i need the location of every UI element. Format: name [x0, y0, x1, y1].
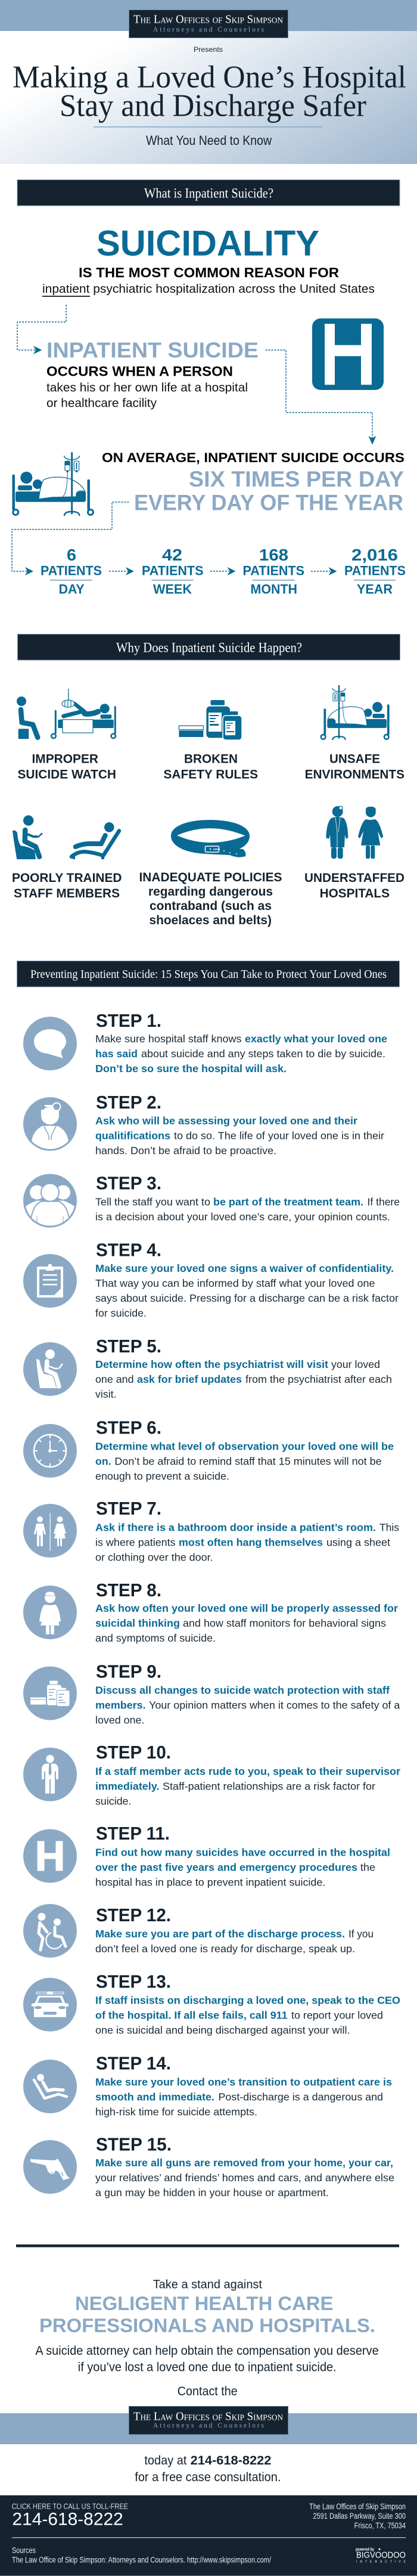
definition text block: INPATIENT SUICIDE — [46, 338, 259, 362]
text: Post-discharge is a dangerous and — [218, 2091, 383, 2103]
call to action text: Contact the — [178, 2385, 238, 2398]
stat: 2,016 patients per year: 2,016 — [351, 546, 398, 564]
icon: staff man — [23, 1748, 77, 1801]
text — [95, 1262, 399, 1319]
title: Stay and Discharge Safer — [60, 89, 366, 123]
arrow — [109, 567, 134, 575]
text: enough to prevent a suicide. — [95, 1470, 229, 1482]
text: Ask if there is a bathroom door inside a patient’s room. — [95, 1522, 376, 1534]
stat: 2,016 patients per year: PATIENTS — [344, 563, 406, 578]
sources — [12, 2546, 271, 2565]
text — [95, 1522, 399, 1563]
call to action text: A suicide attorney can help obtain the compensation you deserve — [35, 2344, 379, 2358]
most common reason text: inpatient psychiatric hospitalization across the United States — [42, 283, 375, 296]
icon: bathroom figures — [23, 1504, 77, 1558]
text — [95, 1765, 400, 1807]
heading: STEP 10. — [96, 1742, 171, 1763]
icon: understaffed hospitals — [326, 806, 383, 859]
stat: 168 patients per month: PATIENTS — [243, 563, 304, 578]
text: a gun may be hidden in your house or apartment. — [95, 2187, 329, 2199]
heading: STEP 2. — [96, 1092, 161, 1113]
label: poorly trained staff members — [12, 871, 122, 900]
step 14 — [23, 2053, 392, 2118]
footer panel — [0, 2495, 417, 2576]
most common reason text — [42, 265, 375, 297]
big voodoo logo: INTERACTIVE — [356, 2560, 406, 2564]
arrow: from inpatient to definition — [17, 305, 66, 354]
phone call to action: 214-618-8222 — [191, 2454, 271, 2467]
icon: unsafe environments — [321, 685, 390, 740]
phone number: 214-618-8222 — [12, 2509, 123, 2529]
text: Make sure all guns are removed from your home, your car, — [95, 2157, 393, 2169]
text: Determine how often the psychiatrist will visit — [95, 1358, 328, 1370]
step 8 — [23, 1580, 398, 1644]
stat: 168 patients per month — [243, 546, 304, 597]
sources: The Law Office of Skip Simpson: Attorneys and Counselors. http://www.skipsimpson.com/ — [12, 2556, 271, 2565]
definition text block: OCCURS WHEN A PERSON — [46, 364, 233, 379]
icon: clipboard — [23, 1254, 77, 1308]
title: Making a Loved One’s Hospital — [13, 60, 406, 94]
definition text block: or healthcare facility — [46, 397, 157, 410]
text: be part of the treatment team. — [213, 1196, 363, 1208]
text: Make sure hospital staff knows — [95, 1033, 242, 1045]
stat: 6 patients per day: PATIENTS — [41, 563, 102, 578]
text: and symptoms of suicide. — [95, 1632, 216, 1644]
most common reason text: IS THE MOST COMMON REASON FOR — [79, 265, 339, 280]
big voodoo logo — [356, 2547, 406, 2564]
text: If there — [367, 1196, 400, 1208]
heading: STEP 7. — [96, 1498, 161, 1519]
text: If a staff member acts rude to you, speak to their supervisor — [95, 1765, 400, 1777]
heading: STEP 4. — [96, 1239, 161, 1260]
text — [95, 1358, 392, 1400]
heading: STEP 15. — [96, 2134, 172, 2154]
text: says about suicide. Pressing for a discharge can be a risk factor — [95, 1292, 399, 1304]
text: one is suicidal and being discharged against your will. — [95, 2024, 350, 2036]
law firm logo — [129, 10, 288, 38]
icon: hospital H — [23, 1829, 77, 1883]
text: using a sheet — [326, 1536, 390, 1548]
icon: hospital bed with IV — [12, 452, 93, 516]
label: unsafe environments: UNSAFE — [329, 753, 380, 766]
text: about suicide and any steps taken to die by suicide. — [141, 1048, 385, 1060]
text: visit. — [95, 1388, 117, 1400]
icon: belt — [171, 820, 250, 857]
text: suicidal thinking — [95, 1617, 180, 1629]
icon: therapist — [23, 1342, 77, 1396]
icon: nurse — [23, 1586, 77, 1639]
label: inadequate policies: contraband (such as — [150, 899, 272, 913]
call us text: CLICK HERE TO CALL US TOLL-FREE — [12, 2502, 128, 2510]
icon: hospital H — [312, 318, 384, 390]
call to action text: PROFESSIONALS AND HOSPITALS. — [39, 2315, 375, 2336]
text — [95, 1994, 400, 2036]
text: your relatives’ and friends’ homes and cars, and anywhere else — [95, 2172, 394, 2184]
heading: STEP 1. — [96, 1010, 161, 1031]
step 2 — [23, 1092, 384, 1156]
text — [95, 1033, 387, 1075]
text: over the past five years and emergency procedures — [95, 1862, 357, 1874]
label: unsafe environments: ENVIRONMENTS — [305, 768, 404, 781]
text — [95, 2076, 392, 2118]
text: Tell the staff you want to — [95, 1196, 210, 1208]
icon: broken safety rules — [179, 700, 242, 740]
label: understaffed hospitals — [304, 871, 404, 900]
heading: STEP 12. — [96, 1905, 171, 1925]
label: inadequate policies — [139, 871, 282, 927]
step 5 — [23, 1336, 392, 1400]
text: smooth and immediate. — [95, 2091, 214, 2103]
law firm logo: Attorneys and Counselors — [153, 2422, 264, 2429]
step 11 — [23, 1823, 390, 1888]
heading: STEP 9. — [96, 1661, 161, 1682]
presents: Presents — [194, 45, 223, 54]
icon: speech bubble — [23, 1017, 77, 1070]
phone call to action — [135, 2454, 281, 2484]
stat: 168 patients per month: MONTH — [250, 582, 297, 597]
text: Make sure your loved one signs a waiver of confidentiality. — [95, 1262, 394, 1274]
text: is where patients — [95, 1536, 176, 1548]
step 12 — [23, 1904, 374, 1958]
icon: police car — [23, 1978, 77, 2032]
text: If staff insists on discharging a loved one, speak to the CEO — [95, 1994, 400, 2006]
call to action text — [35, 2278, 379, 2398]
suicidality heading: SUICIDALITY — [97, 224, 319, 264]
icon: reclining patient — [23, 2060, 77, 2113]
law firm logo: The Law Offices of Skip Simpson — [133, 2410, 283, 2423]
stat: 42 patients per week: 42 — [162, 546, 182, 564]
text: high-risk time for suicide attempts. — [95, 2106, 257, 2118]
text — [95, 1114, 384, 1156]
heading: STEP 11. — [96, 1823, 170, 1844]
text: to do so. The life of your loved one is in their — [174, 1129, 384, 1141]
text: Staff-patient relationships are a risk factor for — [163, 1780, 375, 1792]
law firm logo: Attorneys and Counselors — [153, 26, 264, 33]
step 10 — [23, 1742, 400, 1807]
text: or clothing over the door. — [95, 1552, 213, 1563]
icon: person pushing wheelchair — [23, 1904, 77, 1958]
step 13 — [23, 1971, 400, 2036]
top band — [0, 0, 417, 31]
label: inadequate policies: regarding dangerous — [148, 885, 273, 899]
text: from the psychiatrist after each — [245, 1373, 392, 1385]
definition text block — [46, 338, 259, 410]
icon: poorly trained staff members — [13, 815, 119, 859]
text: Ask who will be assessing your loved one and their — [95, 1114, 357, 1126]
label: understaffed hospitals: UNDERSTAFFED — [304, 871, 404, 885]
text: Find out how many suicides have occurred in the hospital — [95, 1846, 390, 1858]
section band: why does it happen — [18, 634, 400, 660]
stat: 42 patients per week — [142, 546, 204, 597]
text: on. — [95, 1455, 111, 1467]
step 3 — [23, 1173, 400, 1228]
text — [95, 1196, 400, 1222]
heading: STEP 14. — [96, 2053, 171, 2074]
header panel — [0, 0, 417, 164]
phone call to action: for a free case consultation. — [135, 2470, 281, 2484]
step 6 — [23, 1417, 394, 1482]
text: That way you can be informed by staff what your loved one — [95, 1277, 375, 1289]
section band: 15 steps: Preventing Inpatient Suicide: 15 Steps You Can Take to Protect Your Loved Ones — [30, 968, 387, 981]
text: Don’t be so sure the hospital will ask. — [95, 1063, 287, 1075]
stat: 6 patients per day: 6 — [67, 546, 76, 564]
frequency text: EVERY DAY OF THE YEAR — [134, 490, 403, 515]
text: Discuss all changes to suicide watch protection with staff — [95, 1684, 390, 1696]
label: inadequate policies: INADEQUATE POLICIES — [139, 871, 282, 884]
step 7 — [23, 1498, 399, 1563]
label: broken safety rules: BROKEN — [184, 753, 238, 766]
text — [95, 1928, 374, 1955]
text: Make sure your loved one’s transition to outpatient care is — [95, 2076, 392, 2088]
text — [95, 1846, 390, 1888]
text: Don’t be afraid to remind staff that 15 minutes will not be — [114, 1455, 382, 1467]
stat: 168 patients per month: 168 — [259, 546, 288, 564]
section band: why does it happen: Why Does Inpatient Suicide Happen? — [116, 640, 302, 655]
label: unsafe environments — [305, 753, 404, 781]
stat: 6 patients per day: DAY — [59, 582, 85, 597]
label: improper suicide watch: SUICIDE WATCH — [18, 768, 116, 781]
label: understaffed hospitals: HOSPITALS — [320, 887, 390, 900]
text: qualitifications — [95, 1129, 170, 1141]
section band: 15 steps — [17, 961, 399, 987]
icon: doctor — [23, 1097, 77, 1151]
stat: 42 patients per week: PATIENTS — [142, 563, 204, 578]
icon: improper suicide watch — [17, 689, 116, 739]
text — [95, 1684, 400, 1726]
address: Frisco, TX, 75034 — [354, 2521, 406, 2530]
section band: what is inpatient suicide — [17, 180, 400, 206]
heading: STEP 8. — [96, 1580, 161, 1600]
text: Determine what level of observation your loved one will be — [95, 1440, 394, 1452]
icon: group of people — [23, 1174, 77, 1228]
text: Make sure you are part of the discharge process. — [95, 1928, 345, 1940]
call to action text: NEGLIGENT HEALTH CARE — [75, 2293, 333, 2314]
text — [95, 1602, 398, 1644]
phone call to action: today at — [144, 2454, 187, 2467]
arrow — [210, 567, 236, 575]
arrow — [311, 567, 337, 575]
text: ask for brief updates — [137, 1373, 242, 1385]
step 4 — [23, 1239, 399, 1319]
call to action text: if you’ve lost a loved one due to inpatient suicide. — [78, 2361, 337, 2374]
text: is a decision about your loved one’s care, your opinion counts. — [95, 1210, 390, 1222]
text: Your opinion matters when it comes to the safety of a — [149, 1699, 400, 1711]
sources: Sources — [12, 2546, 36, 2555]
text: hospital has in place to prevent inpatient suicide. — [95, 1876, 325, 1888]
text: immediately. — [95, 1780, 159, 1792]
text: the — [360, 1862, 375, 1874]
law firm logo: The Law Offices of Skip Simpson — [133, 13, 283, 26]
label: improper suicide watch — [18, 753, 116, 781]
title — [13, 60, 406, 123]
label: poorly trained staff members: POORLY TRAINED — [12, 871, 122, 885]
text: loved one. — [95, 1714, 144, 1726]
icon: pill bottles and blade — [23, 1667, 77, 1720]
text: This — [379, 1522, 399, 1534]
call to action text: Take a stand against — [153, 2278, 262, 2292]
definition text block: takes his or her own life at a hospital — [46, 382, 248, 395]
header gradient background — [0, 31, 417, 164]
contact band — [0, 2413, 417, 2444]
text: to report your loved — [291, 2009, 383, 2021]
stat: 6 patients per day — [41, 546, 102, 597]
subtitle: What You Need to Know — [146, 133, 272, 148]
text: most often hang themselves — [179, 1536, 323, 1548]
section band: what is inpatient suicide: What is Inpatient Suicide? — [144, 186, 273, 200]
heading: STEP 13. — [96, 1971, 171, 1992]
text: hands. Don’t be afraid to be proactive. — [95, 1144, 276, 1156]
arrow: definition to frequency — [266, 350, 376, 445]
stat: 2,016 patients per year: YEAR — [357, 582, 393, 597]
text: Ask how often your loved one will be properly assessed for — [95, 1602, 398, 1614]
label: poorly trained staff members: STAFF MEMBERS — [14, 887, 120, 900]
text: and how staff monitors for behavioral signs — [183, 1617, 386, 1629]
text: of the hospital. If all else fails, call 911 — [95, 2009, 288, 2021]
text: don’t feel a loved one is ready for discharge, speak up. — [95, 1943, 355, 1955]
heading: STEP 5. — [96, 1336, 161, 1357]
icon: clock — [23, 1424, 77, 1478]
label: broken safety rules — [163, 753, 258, 781]
label: improper suicide watch: IMPROPER — [32, 753, 98, 766]
text: members. — [95, 1699, 146, 1711]
frequency text: ON AVERAGE, INPATIENT SUICIDE OCCURS — [102, 450, 404, 465]
text: If you — [348, 1928, 374, 1940]
text: one and — [95, 1373, 133, 1385]
arrow: frequency to statistics — [12, 502, 129, 575]
stat: 2,016 patients per year — [344, 546, 406, 597]
text: exactly what your loved one — [245, 1033, 387, 1045]
label: broken safety rules: SAFETY RULES — [163, 768, 258, 781]
text: your loved — [331, 1358, 380, 1370]
text: has said — [95, 1048, 138, 1060]
address — [309, 2502, 406, 2530]
stat: 42 patients per week: WEEK — [153, 582, 192, 597]
step 1 — [23, 1010, 387, 1075]
heading: STEP 3. — [96, 1173, 161, 1194]
frequency text: SIX TIMES PER DAY — [189, 467, 404, 491]
text: suicide. — [95, 1795, 131, 1807]
frequency text — [102, 450, 404, 515]
step 15 — [23, 2134, 394, 2199]
big voodoo logo: BIGVOODOO — [356, 2550, 406, 2560]
heading: STEP 6. — [96, 1417, 161, 1438]
text — [95, 2157, 394, 2199]
text — [95, 1440, 394, 1482]
icon: revolver — [23, 2140, 77, 2194]
text: for suicide. — [95, 1307, 147, 1319]
label: inadequate policies: shoelaces and belts) — [149, 914, 272, 927]
big voodoo logo: powered by — [356, 2547, 374, 2552]
law firm logo — [129, 2407, 288, 2434]
step 9 — [23, 1661, 400, 1726]
